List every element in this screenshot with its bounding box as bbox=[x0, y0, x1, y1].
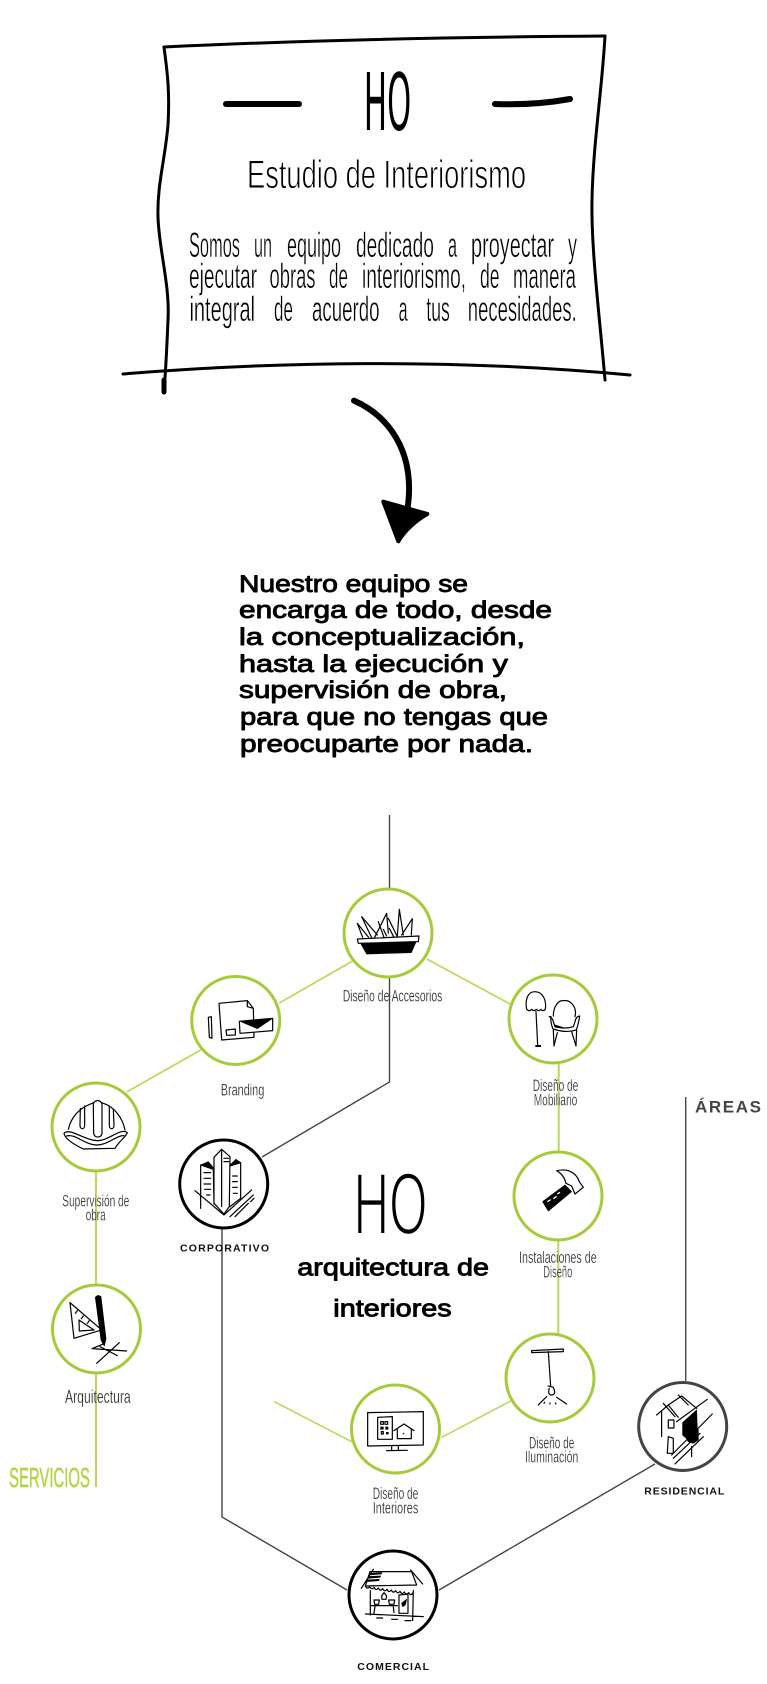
label: Diseño de bbox=[373, 1485, 418, 1503]
label: Diseño bbox=[543, 1264, 572, 1282]
node: Diseño de Mobiliario bbox=[509, 975, 597, 1110]
node: Residencial bbox=[639, 1382, 727, 1497]
connector lines: areas bbox=[222, 815, 686, 1590]
icon: lamp and armchair bbox=[526, 992, 580, 1047]
node: Instalaciones de Diseño bbox=[514, 1152, 602, 1282]
areas heading: ÁREAS bbox=[695, 1098, 761, 1117]
node: Diseño de Accesorios bbox=[343, 889, 442, 1006]
label: obra bbox=[86, 1207, 106, 1225]
intro paragraph: dedicado bbox=[356, 226, 434, 265]
intro paragraph: ejecutar bbox=[189, 257, 257, 296]
label bbox=[373, 1485, 418, 1517]
intro paragraph: de bbox=[480, 257, 500, 296]
handwritten paragraph: encarga de todo, desde bbox=[239, 597, 552, 624]
label: Supervisión de bbox=[62, 1193, 129, 1211]
icon: shopfront bbox=[361, 1569, 423, 1621]
icon: house sketch bbox=[657, 1395, 712, 1464]
label: Instalaciones de bbox=[519, 1249, 597, 1267]
services heading: SERVICIOS bbox=[9, 1462, 90, 1493]
node: Diseño de Interiores bbox=[352, 1385, 440, 1517]
label: Diseño de Accesorios bbox=[343, 988, 442, 1006]
handwritten paragraph: Nuestro equipo se bbox=[239, 571, 468, 598]
handwritten paragraph: para que no tengas que bbox=[240, 704, 548, 731]
label: Interiores bbox=[373, 1499, 418, 1517]
label: CORPORATIVO bbox=[180, 1243, 269, 1255]
title dashes bbox=[226, 99, 570, 104]
icon: plant in pot bbox=[357, 909, 419, 954]
label: Diseño de bbox=[533, 1077, 578, 1095]
label bbox=[525, 1434, 578, 1467]
node: Comercial bbox=[349, 1551, 437, 1673]
icon: set square and pencil bbox=[70, 1295, 127, 1363]
intro paragraph: integral bbox=[190, 290, 255, 329]
intro paragraph: interiorismo, bbox=[362, 257, 466, 296]
label: Mobiliario bbox=[534, 1092, 577, 1110]
intro paragraph: necesidades. bbox=[468, 290, 577, 329]
icon: pendant lamp bbox=[532, 1349, 567, 1405]
intro paragraph: obras bbox=[270, 257, 316, 296]
handwritten paragraph: hasta la ejecución y bbox=[239, 651, 508, 678]
label: Diseño de bbox=[529, 1434, 574, 1452]
intro paragraph: a bbox=[399, 290, 408, 329]
title HO: HO bbox=[364, 52, 412, 152]
label bbox=[533, 1077, 578, 1110]
node: Supervisión de obra bbox=[52, 1083, 140, 1225]
intro paragraph: proyectar bbox=[471, 226, 554, 265]
icon: hard hat bbox=[64, 1101, 127, 1149]
subtitle: Estudio de Interiorismo bbox=[247, 153, 526, 197]
central subtitle: interiores bbox=[333, 1296, 452, 1323]
handwritten paragraph bbox=[239, 571, 552, 758]
intro paragraph bbox=[189, 226, 577, 329]
label bbox=[519, 1249, 597, 1282]
node: Arquitectura bbox=[52, 1285, 140, 1407]
arrow bbox=[354, 401, 427, 541]
label: RESIDENCIAL bbox=[644, 1485, 725, 1497]
icon: stationery bbox=[208, 1001, 273, 1040]
intro paragraph: de bbox=[274, 290, 293, 329]
intro paragraph: y bbox=[568, 226, 577, 265]
node: Corporativo bbox=[180, 1140, 269, 1255]
hand-drawn title frame bbox=[123, 36, 630, 393]
label: Arquitectura bbox=[65, 1387, 131, 1407]
intro paragraph: a bbox=[448, 226, 457, 265]
connector lines: services bbox=[96, 959, 559, 1487]
label bbox=[62, 1193, 129, 1225]
handwritten paragraph: preocuparte por nada. bbox=[240, 731, 533, 758]
node: Diseño de Iluminación bbox=[506, 1334, 594, 1467]
intro paragraph: acuerdo bbox=[312, 290, 380, 329]
intro paragraph: manera bbox=[513, 257, 576, 296]
icon: hammer bbox=[543, 1170, 583, 1211]
label: Branding bbox=[221, 1082, 264, 1100]
label: Iluminación bbox=[525, 1449, 578, 1467]
icon: office towers bbox=[195, 1149, 254, 1217]
icon: monitor with floor plan bbox=[368, 1412, 423, 1451]
label: COMERCIAL bbox=[357, 1661, 430, 1673]
node: Branding bbox=[192, 976, 280, 1100]
central HO: HO bbox=[354, 1155, 427, 1254]
intro paragraph: equipo bbox=[287, 226, 341, 265]
central subtitle bbox=[297, 1255, 489, 1323]
handwritten paragraph: supervisión de obra, bbox=[239, 677, 507, 704]
handwritten paragraph: la conceptualización, bbox=[239, 624, 525, 651]
intro paragraph: Somos bbox=[189, 226, 240, 265]
central subtitle: arquitectura de bbox=[297, 1255, 489, 1282]
intro paragraph: un bbox=[254, 226, 272, 265]
intro paragraph: de bbox=[329, 257, 348, 296]
intro paragraph: tus bbox=[426, 290, 450, 329]
